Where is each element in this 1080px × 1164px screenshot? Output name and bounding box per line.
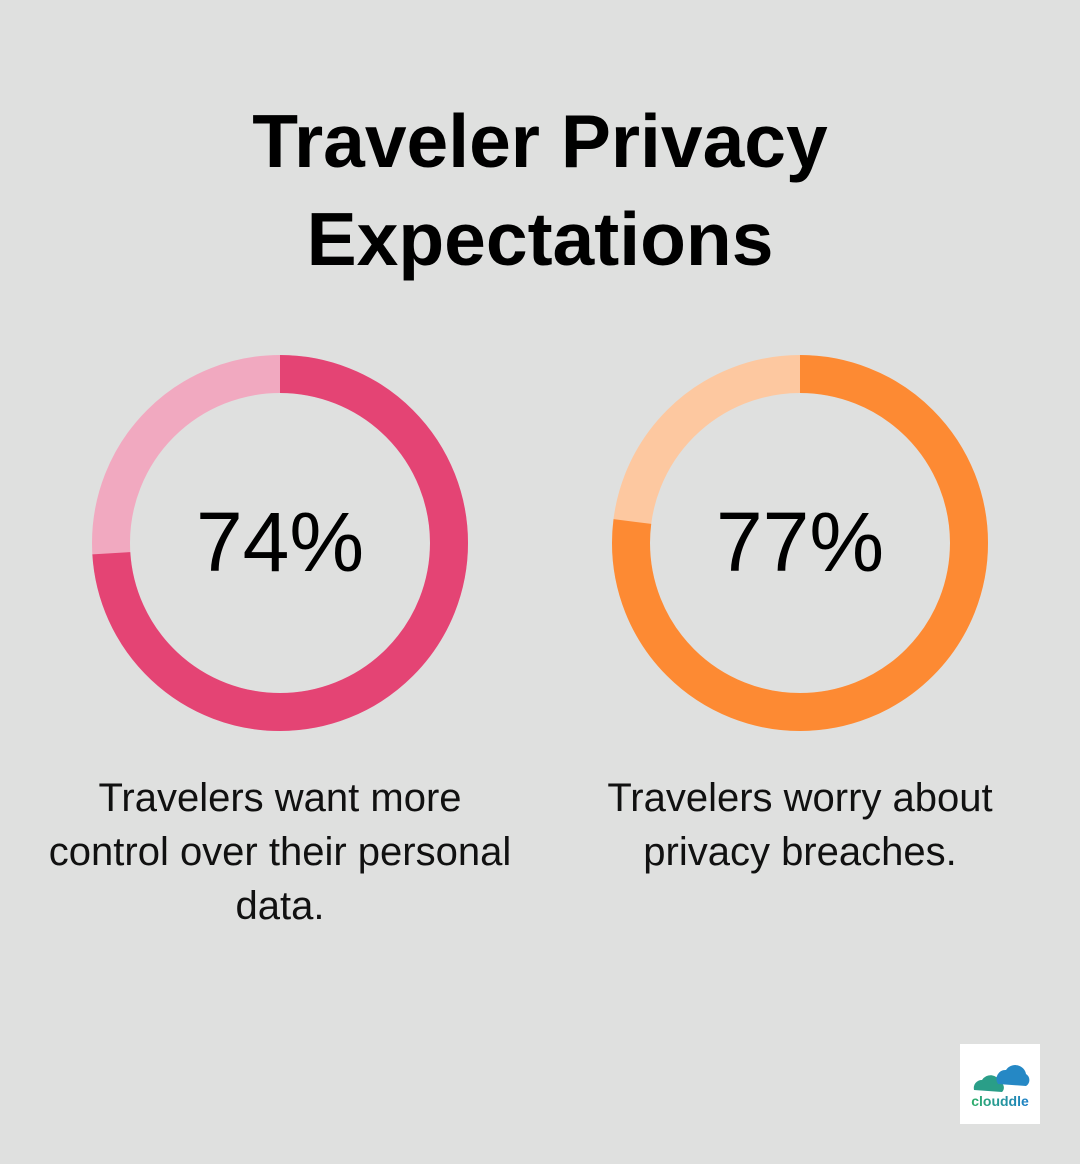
- chart: donut 77%: 77%: [716, 495, 884, 589]
- caption: 74%: [49, 776, 511, 928]
- chart: donut 74%: [92, 355, 468, 731]
- caption: 74%: data.: [236, 884, 324, 928]
- caption: 74%: Travelers want more: [98, 776, 462, 820]
- title: Traveler Privacy: [252, 99, 828, 183]
- logo: clouddle: [960, 1044, 1040, 1124]
- chart: donut 74%: 74%: [196, 495, 364, 589]
- caption: 77%: Travelers worry about: [607, 776, 993, 820]
- caption: 77%: privacy breaches.: [643, 830, 957, 874]
- logo: clouddle: clouddle: [971, 1093, 1029, 1109]
- title: [252, 99, 828, 281]
- caption: 74%: control over their personal: [49, 830, 511, 874]
- title: Expectations: [307, 197, 773, 281]
- chart: donut 77%: [612, 355, 988, 731]
- caption: 77%: [607, 776, 993, 874]
